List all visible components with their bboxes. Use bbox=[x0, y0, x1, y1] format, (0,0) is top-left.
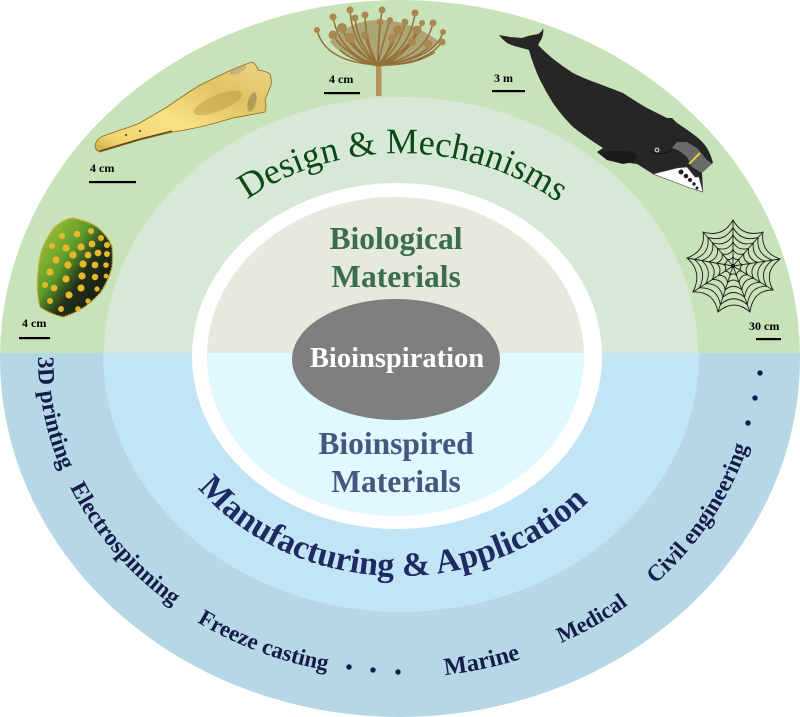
scale bar: whale 3 m: 3 m bbox=[494, 71, 513, 85]
label: freeze casting: Freeze casting bbox=[197, 609, 329, 674]
baleen bbox=[672, 142, 712, 173]
lower jaw bbox=[653, 167, 703, 192]
panel: inner upper half biological materials bbox=[207, 197, 584, 353]
scale bar: web 30 cm: 30 cm bbox=[749, 319, 779, 333]
ellipsis dots bottom bbox=[346, 664, 401, 675]
center ellipse: bioinspiration: Bioinspiration bbox=[310, 343, 484, 374]
scale bar: web 30 cm bbox=[749, 319, 781, 340]
scale bar: cactus 4 cm bbox=[19, 316, 50, 339]
panel: middle upper ring bbox=[104, 97, 698, 353]
scale bar: flower 4 cm bbox=[324, 72, 360, 94]
heading: bioinspired materials: Materials bbox=[331, 464, 461, 499]
panel: outer upper ring biological specimens bbox=[0, 0, 800, 353]
icon: cactus pad bbox=[37, 218, 113, 317]
heading: design and mechanisms: Design & Mechanisms bbox=[236, 130, 566, 200]
label: electrospinning: Electrospinning bbox=[70, 480, 180, 608]
icon: spider web bbox=[687, 220, 780, 312]
icon: bone bbox=[95, 62, 271, 152]
label: 3D printing: 3D printing bbox=[35, 358, 72, 472]
scale bar: whale 3 m bbox=[492, 71, 525, 92]
panel: middle lower ring bbox=[103, 353, 699, 612]
icon: dried flower umbel bbox=[314, 6, 446, 96]
panel: outer lower ring manufacturing methods and applications bbox=[0, 353, 800, 717]
center ellipse: bioinspiration bbox=[292, 299, 500, 420]
baleen yellow marker bbox=[689, 153, 700, 164]
ellipsis dots right bbox=[745, 370, 763, 426]
scale bar: bone 4 cm: 4 cm bbox=[90, 161, 114, 175]
scale bar: bone 4 cm bbox=[89, 161, 136, 183]
label: civil engineering: Civil engineering bbox=[648, 442, 752, 581]
label: marine: Marine bbox=[443, 649, 520, 676]
scale bar: cactus 4 cm: 4 cm bbox=[22, 316, 46, 330]
heading: biological materials: Biological bbox=[330, 221, 462, 256]
heading: biological materials: Materials bbox=[331, 259, 461, 294]
scale bar: flower 4 cm: 4 cm bbox=[329, 72, 353, 86]
white separator ring bbox=[192, 183, 602, 529]
heading: manufacturing and application: Manufacturing & Application bbox=[198, 473, 588, 584]
panel: inner lower half bioinspired materials bbox=[207, 353, 584, 516]
eye bbox=[655, 148, 659, 152]
icon: bowhead whale bbox=[499, 28, 713, 192]
label: medical: Medical bbox=[555, 592, 628, 643]
flipper bbox=[597, 151, 637, 164]
heading: bioinspired materials: Bioinspired bbox=[318, 426, 474, 461]
mouth line bbox=[650, 150, 672, 154]
